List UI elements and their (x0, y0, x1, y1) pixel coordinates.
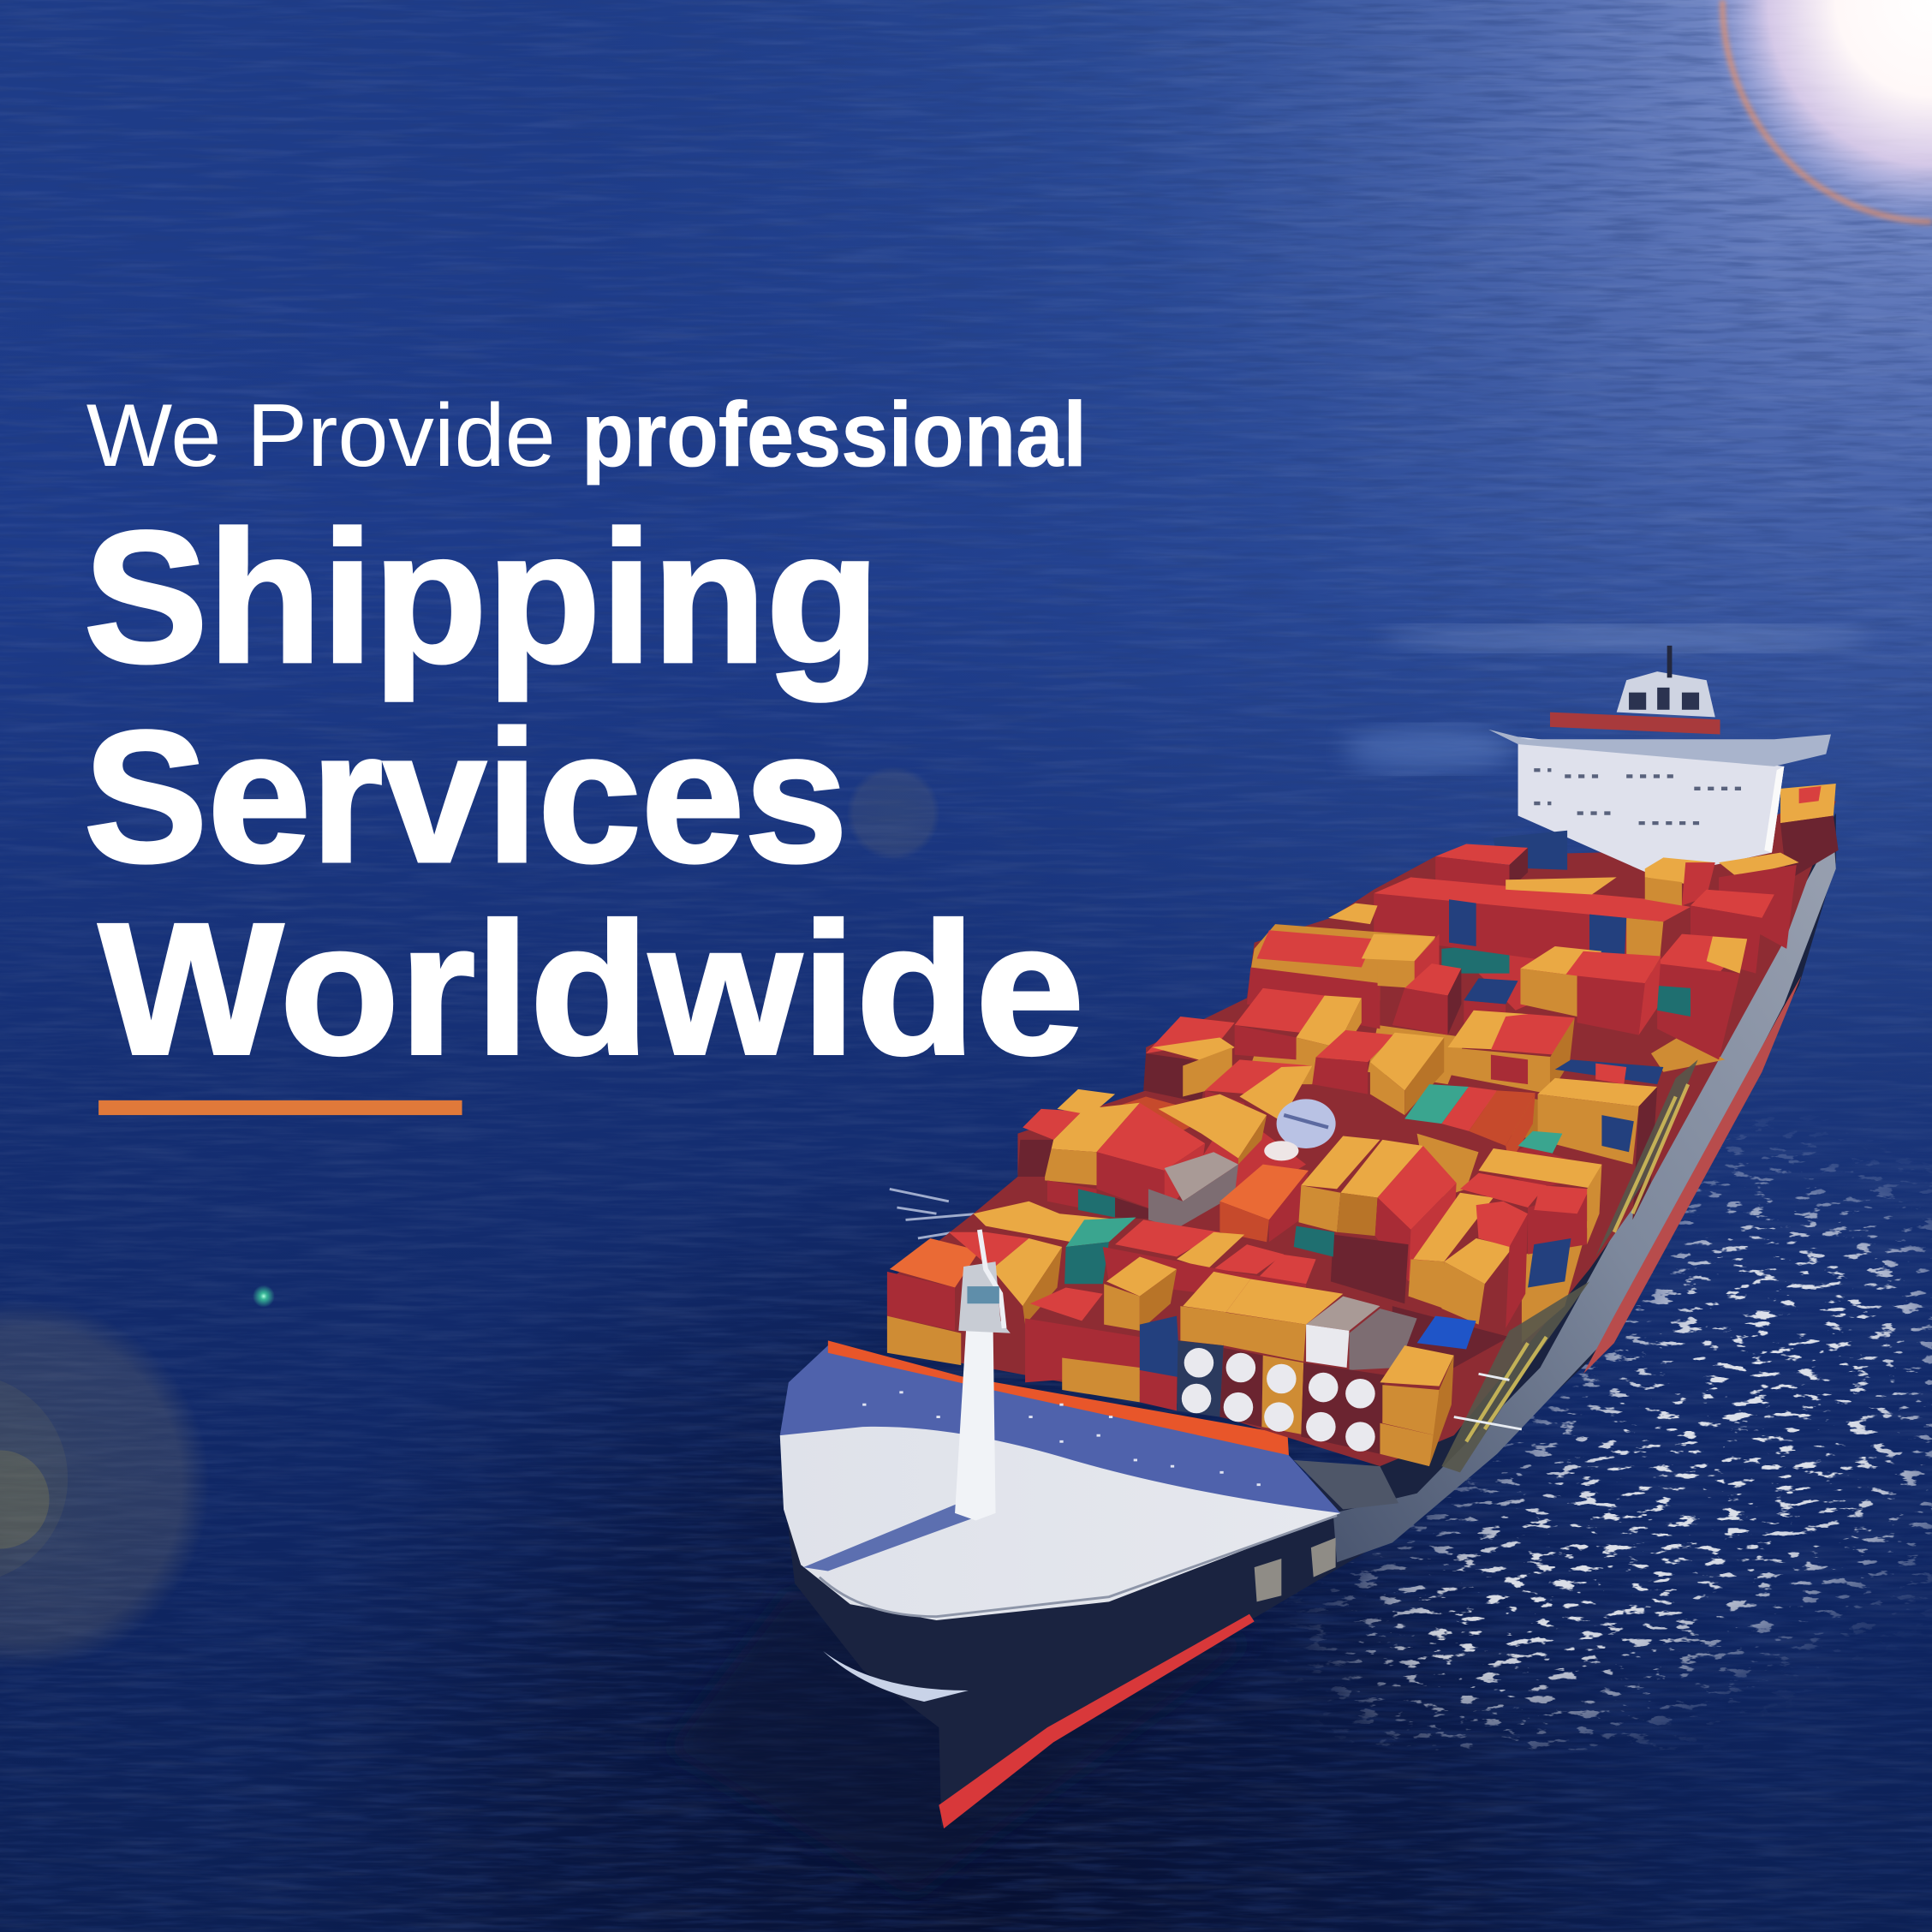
deck speckles (862, 1392, 1261, 1485)
row: yellow top right lower block (1460, 1148, 1601, 1288)
hull grey side (1333, 832, 1836, 1562)
hull dark lower body (781, 814, 1836, 1826)
row: teal and orange pair (1404, 1084, 1535, 1165)
bow highlight under flare (823, 1651, 969, 1702)
superstructure: funnel mast (1667, 646, 1672, 677)
row: centre yellow long box (1312, 1030, 1444, 1115)
intro line: We Provide (86, 385, 556, 485)
row: small red far-left forward box (1017, 1089, 1115, 1177)
containers stack base (887, 801, 1836, 1466)
lens flare: green spark (253, 1285, 275, 1308)
stack lower cabins by bow (1294, 1460, 1398, 1509)
superstructure: tower (1617, 671, 1715, 717)
wake glow near superstructure (1343, 727, 1516, 772)
deck railing (820, 1516, 1337, 1617)
row: right upper cluster (1645, 853, 1799, 1059)
side machinery along hull (1441, 1059, 1698, 1472)
row: red box right of block (1392, 963, 1461, 1035)
hatches on hull (1255, 1538, 1336, 1601)
row: right central yellow-red box (1448, 1011, 1575, 1094)
grey container (1148, 1152, 1238, 1228)
forward row: yellow containers top (1180, 1272, 1476, 1370)
container ship (665, 646, 1839, 1898)
forward row: left red-yellow boxes (887, 1232, 1062, 1365)
title line: Services: Services (84, 693, 848, 902)
mast shadow (803, 1503, 974, 1571)
row: big yellow-red center box (1294, 1136, 1457, 1303)
superstructure: red bridge stripe (1550, 713, 1720, 735)
satellite dome radome (1264, 1099, 1336, 1160)
row: top back red box (1435, 844, 1528, 890)
row: forward big red box (1045, 1103, 1205, 1219)
hull shadow (665, 1589, 1257, 1898)
sun glare with lens ring (1676, 0, 1932, 241)
row: right deep stack (1538, 1059, 1663, 1219)
row: wide band of containers (1374, 877, 1690, 976)
red waterline along hull (1583, 976, 1801, 1374)
row: central top box (1235, 988, 1362, 1062)
aft container stack (1780, 784, 1839, 881)
row: yellow box beside satellite dome (1158, 1094, 1267, 1165)
front right yellow box (1380, 1345, 1454, 1466)
mast tower (955, 1230, 1011, 1520)
foam by bow at left of containers (890, 1189, 980, 1238)
water wake: sea foam beside hull (1281, 1109, 1932, 1750)
row: far left upper stack (1143, 1017, 1235, 1103)
orange deck edge (828, 1340, 1289, 1455)
lens flare: small disc by Services (846, 766, 940, 860)
red bulb keel (939, 1614, 1255, 1828)
superstructure: accommodation block (1518, 736, 1784, 877)
orange underline (98, 1100, 462, 1115)
title line: Shipping: Shipping (84, 493, 880, 702)
front row with drum containers (1177, 1340, 1385, 1454)
blue containers by bridge (1494, 831, 1567, 870)
heading group (84, 384, 1087, 1115)
row: red upper-left small box (1205, 1059, 1312, 1124)
row: small blue-red box (1464, 978, 1518, 1029)
lens flare: large disc lower left (0, 1300, 210, 1670)
wake glow around stern (1380, 626, 1873, 651)
title line: Worldwide: Worldwide (98, 885, 1084, 1094)
intro bold word: professional (581, 384, 1087, 486)
row: block behind mid deck (1247, 903, 1439, 1029)
blue shaded deck area (780, 1345, 1340, 1513)
superstructure: bridge wings (1488, 730, 1831, 766)
row: large upper right box (1520, 946, 1661, 1035)
forward row: teal and red band (974, 1202, 1316, 1306)
row: teal small box (1518, 1131, 1562, 1154)
row: yellow box lower right (1409, 1193, 1528, 1328)
container gap fillers (1109, 936, 1725, 1368)
row: orange mid box (1219, 1165, 1309, 1242)
forward row: mid red and yellow boxes (1025, 1257, 1180, 1410)
forecastle white deck (780, 1368, 1340, 1620)
